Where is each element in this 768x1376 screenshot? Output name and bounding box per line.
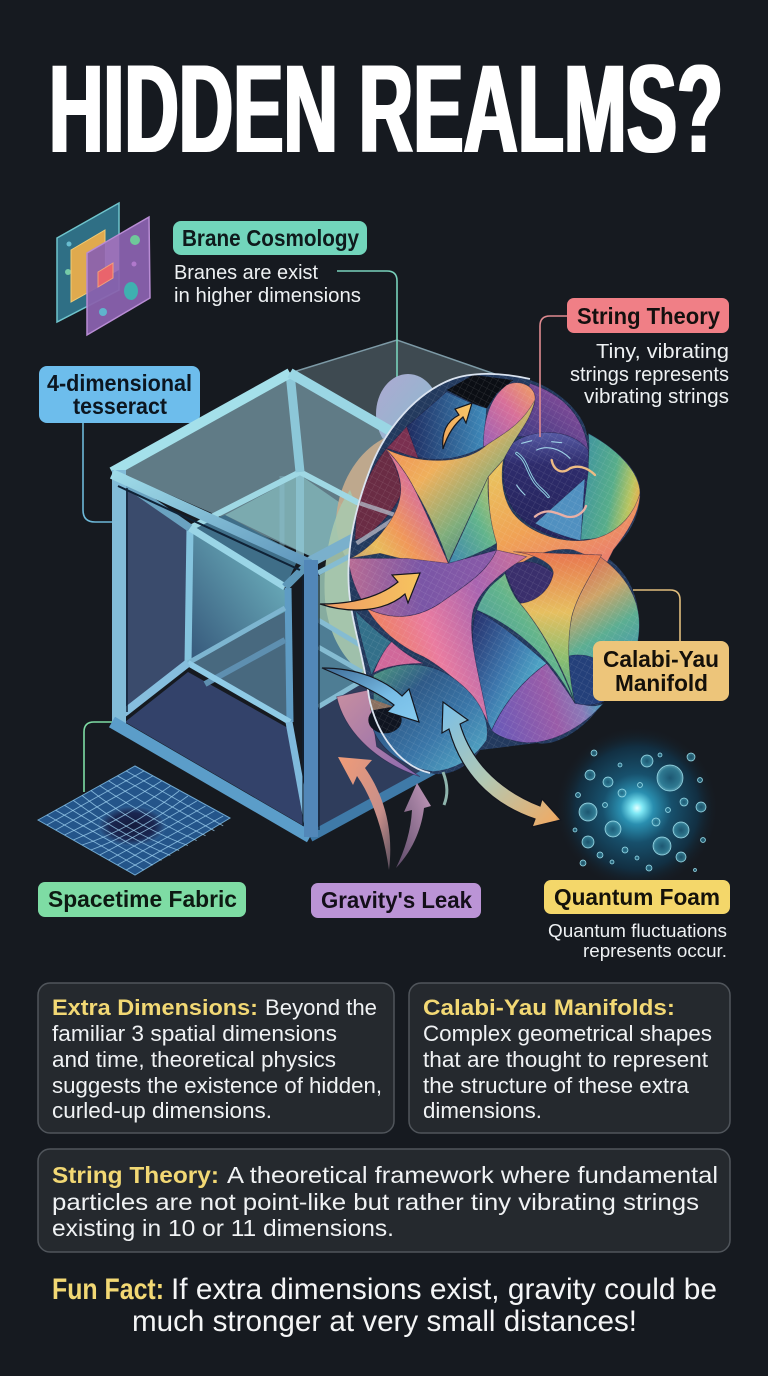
label: Calabi-Yau Manifold: Manifold	[615, 670, 708, 696]
text: string theory description	[570, 340, 729, 408]
fun fact: much stronger at very small distances!	[132, 1305, 637, 1338]
panel: extra dimensions: familiar 3 spatial dimensions	[52, 1021, 337, 1046]
panel: Calabi-Yau manifolds: the structure of these extra	[423, 1073, 689, 1098]
panel: string theory	[38, 1149, 730, 1252]
label: Brane Cosmology: Brane Cosmology	[182, 225, 359, 251]
text: brane description: Branes are exist	[174, 261, 318, 284]
text: quantum foam description	[548, 921, 727, 961]
text: string theory description: strings represents	[570, 363, 729, 386]
arrow: mauve gravity	[396, 783, 431, 868]
icon: stacked branes	[57, 203, 150, 335]
panel: string theory: String Theory:	[52, 1162, 219, 1188]
panel: Calabi-Yau manifolds: that are thought to represent	[423, 1047, 709, 1072]
panel: string theory: particles are not point-like but rather tiny vibrating strings	[52, 1189, 699, 1215]
label: Gravity's Leak	[311, 883, 481, 918]
panel: extra dimensions: and time, theoretical physics	[52, 1047, 336, 1072]
arrow: yellow top	[443, 403, 472, 449]
ghost tesseract box	[290, 340, 535, 480]
label: Brane Cosmology	[173, 221, 367, 255]
label: Quantum Foam	[544, 880, 730, 914]
panel: extra dimensions: suggests the existence of hidden,	[52, 1073, 382, 1098]
arrow: double-headed blue to orange	[442, 702, 561, 827]
fun fact: If extra dimensions exist, gravity could be	[171, 1273, 717, 1306]
text: brane description: in higher dimensions	[174, 284, 361, 307]
label: Spacetime Fabric	[38, 882, 246, 917]
text: quantum foam description: Quantum fluctuations	[548, 921, 727, 941]
arrow: orange middle	[320, 573, 420, 610]
text: string theory description: Tiny, vibrating	[596, 340, 729, 363]
label: 4-dimensional tesseract	[39, 366, 200, 423]
Calabi-Yau manifold	[337, 374, 640, 805]
arrow: salmon gravity	[338, 757, 390, 870]
fun fact	[52, 1273, 717, 1338]
panel: Calabi-Yau manifolds	[409, 983, 730, 1133]
panel: string theory: existing in 10 or 11 dimensions.	[52, 1215, 394, 1241]
tesseract	[112, 373, 470, 837]
panel: extra dimensions: Extra Dimensions:	[52, 995, 258, 1020]
panel: Calabi-Yau manifolds: Calabi-Yau Manifolds:	[423, 995, 675, 1020]
panel: Calabi-Yau manifolds: dimensions.	[423, 1098, 542, 1123]
icon: quantum foam	[555, 726, 719, 890]
vibrating strings	[517, 441, 595, 517]
connector: spacetime fabric	[84, 722, 114, 792]
label: String Theory	[567, 298, 729, 333]
panel: string theory: A theoretical framework where fundamental	[227, 1162, 718, 1188]
label: Quantum Foam: Quantum Foam	[554, 884, 720, 910]
label: Calabi-Yau Manifold	[593, 641, 729, 701]
fun fact: Fun Fact:	[52, 1273, 164, 1306]
text: string theory description: vibrating strings	[584, 385, 729, 408]
text: quantum foam description: represents occur.	[583, 941, 727, 961]
label: Calabi-Yau Manifold: Calabi-Yau	[603, 646, 719, 672]
panel: extra dimensions	[38, 983, 394, 1133]
panel: extra dimensions: Beyond the	[265, 995, 377, 1020]
text: brane description	[174, 261, 361, 307]
connector: Calabi-Yau	[633, 590, 680, 641]
connector: brane to tesseract	[337, 271, 397, 378]
label: 4-dimensional tesseract: 4-dimensional	[47, 370, 192, 396]
panel: extra dimensions: curled-up dimensions.	[52, 1098, 272, 1123]
icon: spacetime fabric grid	[38, 766, 230, 875]
label: Gravity's Leak: Gravity's Leak	[321, 887, 472, 913]
label: Spacetime Fabric: Spacetime Fabric	[48, 886, 237, 912]
connector: string theory	[540, 316, 567, 437]
label: 4-dimensional tesseract: tesseract	[73, 393, 167, 419]
connector: tesseract label	[83, 423, 112, 522]
label: String Theory: String Theory	[577, 303, 720, 329]
arrow: blue into manifold	[322, 668, 419, 722]
panel: Calabi-Yau manifolds: Complex geometrical shapes	[423, 1021, 712, 1046]
